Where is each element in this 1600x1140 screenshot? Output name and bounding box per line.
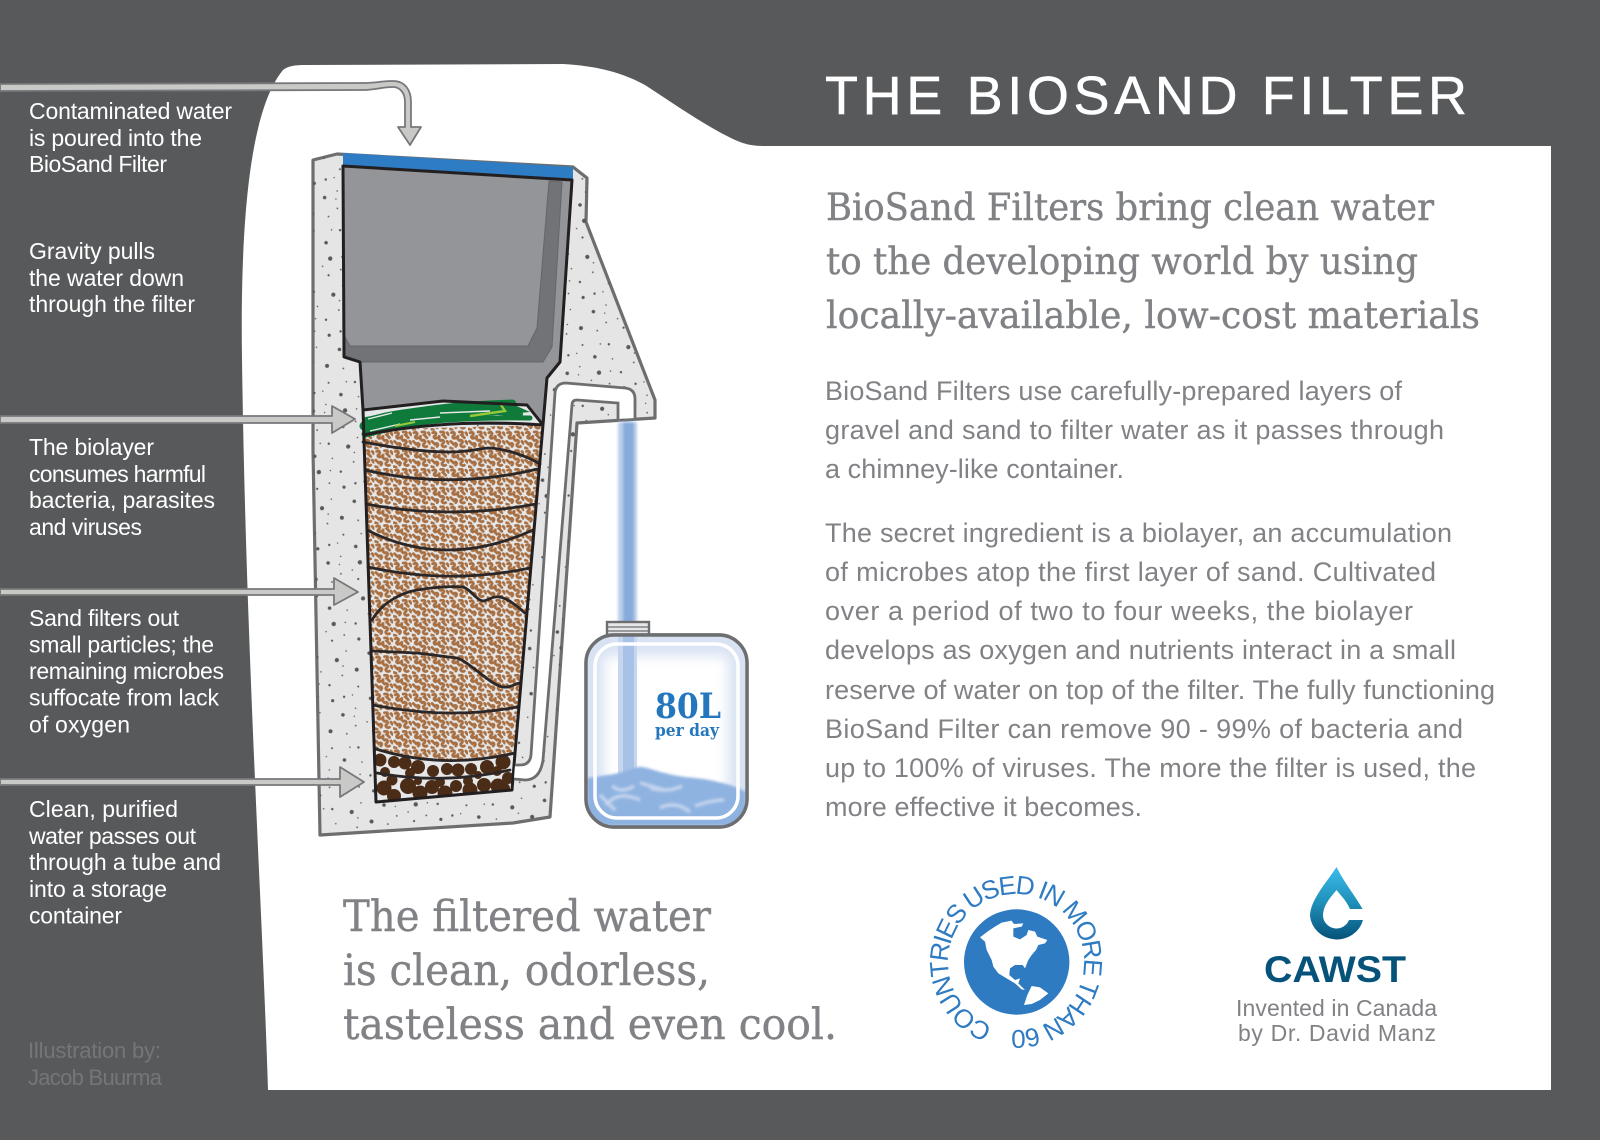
side step label: gravity — [29, 238, 195, 317]
side step label: sand — [29, 605, 224, 738]
side step label: contaminated water — [29, 98, 232, 177]
white content panel — [242, 64, 1551, 1090]
arrow: gravel — [0, 767, 364, 797]
side step label: biolayer — [29, 434, 215, 540]
jug outline — [586, 635, 747, 827]
inventor credit: by Dr. David Manz — [1238, 1020, 1436, 1046]
paragraph: biolayer explanation: up to 100% of viruses. The more the filter is used, the — [825, 753, 1476, 783]
closing statement: The filtered water — [343, 892, 711, 942]
side step label: sand: suffocate from lack — [29, 684, 220, 710]
side step label: clean water — [28, 796, 221, 928]
side step label: contaminated water: Contaminated water — [29, 98, 232, 124]
title: THE BIOSAND FILTER — [825, 66, 1467, 126]
paragraph: biolayer explanation: develops as oxygen and nutrients interact in a small — [825, 635, 1456, 665]
side step label: biolayer: The biolayer — [29, 434, 154, 460]
side step label: biolayer: bacteria, parasites — [29, 487, 215, 513]
chamber interior — [343, 166, 572, 425]
side step label: sand: Sand filters out — [29, 605, 180, 631]
paragraph: biolayer explanation: The secret ingredient is a biolayer, an accumulation — [825, 518, 1452, 548]
side step label: sand: small particles; the — [29, 632, 214, 658]
paragraph: biolayer explanation: more effective it becomes. — [825, 792, 1142, 822]
arrow: biolayer — [0, 406, 355, 433]
paragraph: biolayer explanation: reserve of water on top of the filter. The fully functioning — [825, 675, 1495, 705]
filter cross-section illustration — [313, 153, 747, 835]
inventor credit: Invented in Canada — [1236, 995, 1437, 1021]
side step label: biolayer: and viruses — [29, 514, 142, 540]
side step label: gravity: the water down — [29, 265, 184, 291]
illustration credit — [28, 1038, 163, 1090]
side step label: biolayer: consumes harmful — [29, 461, 206, 487]
side step label: gravity: Gravity pulls — [29, 238, 155, 264]
jug rim highlight — [595, 644, 738, 818]
paragraph: biolayer explanation: over a period of two to four weeks, the biolayer — [825, 596, 1413, 626]
heading text — [826, 186, 1480, 337]
outlet tube — [514, 383, 635, 780]
paragraph: filter layers: gravel and sand to filter water as it passes through — [825, 415, 1444, 445]
paragraph: filter layers — [825, 376, 1444, 484]
side step label: gravity: through the filter — [29, 291, 195, 317]
side step label: contaminated water: BioSand Filter — [29, 151, 167, 177]
heading text: BioSand Filters bring clean water — [826, 186, 1434, 229]
illustration credit: Illustration by: — [28, 1038, 161, 1063]
side step label: contaminated water: is poured into the — [29, 125, 202, 151]
side step label: sand: remaining microbes — [29, 658, 224, 684]
inventor credit — [1236, 995, 1437, 1046]
arrow: sand — [0, 578, 358, 605]
storage jug — [586, 622, 747, 827]
side step label: clean water: through a tube and — [29, 849, 221, 875]
CAWST logo — [1264, 867, 1406, 990]
blue lid — [343, 153, 573, 180]
layer lines — [363, 442, 540, 778]
side step label: sand: of oxygen — [29, 712, 130, 738]
paragraph: filter layers: BioSand Filters use carefully-prepared layers of — [825, 376, 1402, 406]
sand column — [363, 425, 542, 760]
chamber outline — [343, 166, 572, 802]
jug inner glow and water — [587, 636, 746, 826]
closing statement — [343, 892, 837, 1050]
side step label: clean water: into a storage — [29, 876, 167, 902]
side step label: clean water: container — [29, 902, 122, 928]
paragraph: filter layers: a chimney-like container. — [825, 454, 1124, 484]
water stream — [618, 422, 637, 636]
paragraph: biolayer explanation: of microbes atop the first layer of sand. Cultivated — [825, 557, 1436, 587]
heading text: to the developing world by using — [826, 240, 1418, 283]
illustration credit: Jacob Buurma — [28, 1065, 163, 1090]
side step label: clean water: Clean, purified — [29, 796, 178, 822]
closing statement: tasteless and even cool. — [343, 1000, 837, 1050]
wordmark: CAWST — [1264, 949, 1406, 990]
closing statement: is clean, odorless, — [343, 946, 710, 996]
jug body — [586, 635, 747, 827]
jug cap — [607, 622, 649, 635]
heading text: locally-available, low-cost materials — [826, 294, 1480, 337]
capacity label: per day — [655, 721, 719, 740]
inner bucket shelf — [345, 181, 562, 362]
badge: used in more than 60 countries — [930, 876, 1102, 1048]
gravel layers — [376, 750, 514, 800]
globe — [964, 909, 1069, 1015]
capacity label: 80L — [655, 686, 721, 727]
biolayer — [363, 401, 543, 438]
side step label: clean water: water passes out — [28, 823, 197, 849]
concrete housing — [313, 154, 655, 835]
paragraph: biolayer explanation — [825, 518, 1495, 822]
circular caption: COUNTRIES USED IN MORE THAN 60 — [930, 876, 1102, 1048]
icon: water drop — [1310, 867, 1363, 939]
paragraph: biolayer explanation: BioSand Filter can remove 90 - 99% of bacteria and — [825, 714, 1463, 744]
arrow: pour in — [0, 81, 421, 145]
